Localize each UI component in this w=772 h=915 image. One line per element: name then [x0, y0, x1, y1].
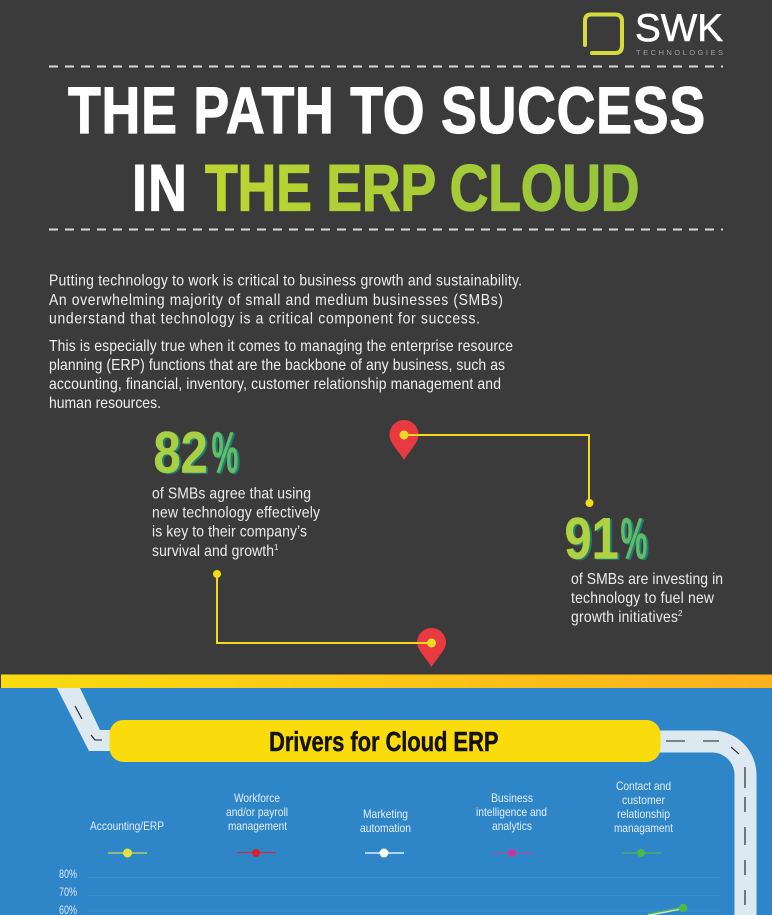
stat: 82%: 1 [274, 543, 279, 552]
logo: SWK Technologies: SWK [635, 7, 723, 50]
legend: Accounting/ERP [90, 819, 164, 858]
intro text: Putting technology to work is critical to business growth and sustainability. [49, 273, 522, 290]
legend: Business intelligence and analytics: Business [491, 791, 533, 805]
legend: Business intelligence and analytics: intelligence and [476, 805, 547, 819]
stat: 82%: is key to their company’s [152, 524, 307, 541]
stat: 91%: % [620, 506, 647, 571]
legend: Contact and customer relationship managament: Contact and [616, 779, 671, 793]
logo: SWK Technologies [585, 7, 723, 57]
stat: 82%: % [214, 421, 240, 486]
stat: 82%: 82 [154, 422, 208, 485]
yellow band [1, 674, 772, 688]
legend: Contact and customer relationship managament: customer [622, 793, 665, 807]
intro text: understand that technology is a critical component for success. [49, 311, 480, 328]
stat: 91%: 2 [678, 609, 683, 618]
legend: Workforce and/or payroll management: management [228, 819, 288, 833]
stat: 82%: 82 [156, 423, 210, 486]
y axis labels: 70% [59, 885, 77, 899]
dark header background [0, 0, 772, 675]
contact series line [648, 904, 687, 915]
stat: 82%: % [212, 420, 238, 485]
stat: 82%: survival and growth [152, 543, 274, 560]
y axis labels: 80% [59, 867, 77, 881]
legend: Workforce and/or payroll management: Workforce [234, 791, 280, 805]
title: IN [132, 151, 187, 225]
legend: Accounting/ERP: Accounting/ERP [90, 819, 164, 833]
legend: Marketing automation: Marketing [363, 807, 408, 821]
intro text: accounting, financial, inventory, customer relationship management and [49, 376, 501, 393]
title: THE PATH TO SUCCESS [68, 74, 705, 147]
stat: 91%: technology to fuel new [571, 590, 714, 607]
legend: Contact and customer relationship managament [614, 779, 674, 857]
title [68, 74, 705, 225]
intro text: human resources. [49, 395, 161, 412]
logo: SWK Technologies: TECHNOLOGIES [636, 48, 723, 57]
intro text: An overwhelming majority of small and medium businesses (SMBs) [49, 292, 503, 309]
intro text: This is especially true when it comes to managing the enterprise resource [49, 338, 513, 355]
heading pill: Drivers for Cloud ERP [269, 727, 499, 758]
stat: 82% [152, 420, 321, 560]
legend: Workforce and/or payroll management [226, 791, 288, 857]
connector path to 91% with red pin [390, 420, 594, 507]
legend: Workforce and/or payroll management: and/or payroll [226, 805, 288, 819]
road: right segment [655, 741, 746, 915]
stat: 91%: % [622, 507, 649, 572]
legend: Business intelligence and analytics [476, 791, 547, 857]
legend: Marketing automation: automation [360, 821, 411, 835]
stat: 91%: 91 [564, 508, 619, 571]
road: left segment [57, 688, 115, 751]
stat: 82%: new technology effectively [152, 505, 321, 522]
title: THE ERP CLOUD [205, 151, 640, 225]
stat: 82%: of SMBs agree that using [152, 486, 311, 503]
legend: Marketing automation [360, 807, 411, 858]
stat: 91%: growth initiatives [571, 609, 678, 626]
line chart [59, 867, 720, 915]
legend: Business intelligence and analytics: analytics [492, 819, 532, 833]
y axis labels [59, 867, 77, 915]
legend: Contact and customer relationship managament: relationship [617, 807, 670, 821]
blue panel: drivers for cloud ERP [0, 674, 772, 915]
stat: 91%: of SMBs are investing in [571, 571, 723, 588]
connector path from 82% with red pin [213, 570, 446, 667]
legend: Contact and customer relationship managament: managament [614, 821, 674, 835]
stat: 91% [564, 506, 723, 626]
intro text [49, 273, 522, 412]
intro text: planning (ERP) functions that are the backbone of any business, such as [49, 357, 505, 374]
heading pill [110, 720, 660, 762]
stat: 91%: 91 [566, 509, 621, 572]
